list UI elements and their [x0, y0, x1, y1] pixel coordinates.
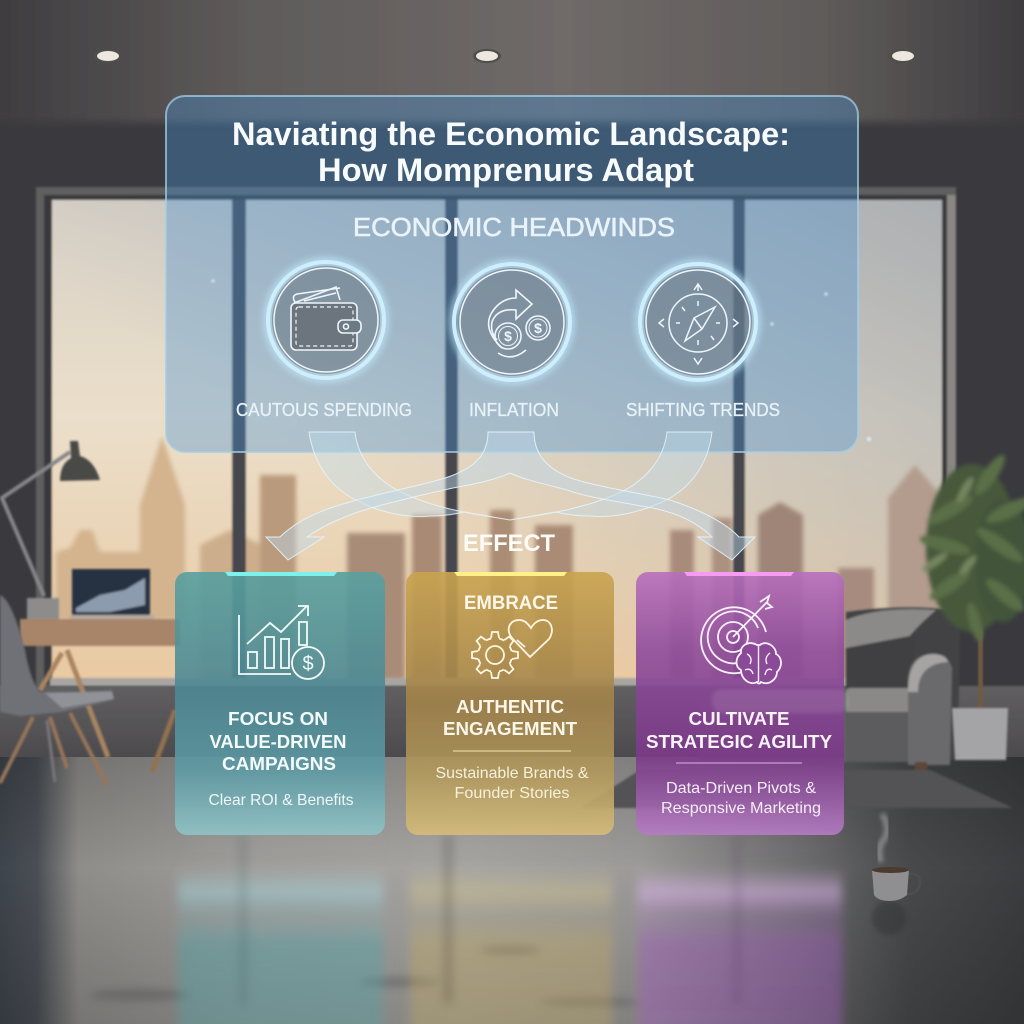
card heading [646, 709, 832, 752]
desk with laptop [20, 569, 180, 772]
card heading: VALUE-DRIVEN [210, 732, 346, 752]
card detail: Founder Stories [454, 785, 570, 802]
coffee cup [872, 814, 920, 935]
card reflections on floor [178, 835, 842, 1024]
card heading: FOCUS ON [228, 709, 328, 729]
card detail: Clear ROI & Benefits [208, 792, 354, 809]
panel: strategic agility [636, 572, 848, 835]
card detail [661, 780, 821, 817]
card divider [453, 750, 571, 752]
panel: value-driven campaigns [175, 572, 385, 835]
card divider [676, 762, 802, 764]
icon: inflation coins in ring [453, 263, 571, 381]
floor [0, 757, 1024, 1024]
icon: wallet in ring [267, 261, 385, 379]
arrows: outer headwinds converging to centre [309, 432, 712, 520]
card detail [436, 765, 589, 802]
card heading: ENGAGEMENT [443, 719, 577, 739]
sparkles [212, 280, 871, 441]
card detail: Responsive Marketing [661, 800, 821, 817]
background wall [0, 110, 1024, 770]
lower wall [0, 686, 1024, 760]
icon: inflation coins in ring: $ [534, 320, 542, 336]
label: shifting trends: SHIFTING TRENDS [626, 400, 780, 420]
icon: gear and heart [472, 620, 552, 678]
card heading: CULTIVATE [688, 709, 790, 729]
title [232, 116, 790, 188]
icon: growth chart with dollar [239, 606, 324, 679]
card heading [443, 697, 577, 739]
potted plant [918, 451, 1024, 760]
icon: inflation coins in ring: $ [504, 328, 512, 344]
arrows: inflation splitting to left and right cards [266, 432, 755, 560]
icon: target and brain [701, 596, 781, 684]
chair [0, 595, 114, 785]
section heading: economic headwinds: ECONOMIC HEADWINDS [353, 212, 675, 242]
effect label: EFFECT [463, 530, 555, 557]
card heading [210, 709, 346, 774]
panel: authentic engagement [406, 572, 614, 835]
icon: growth chart with dollar: $ [302, 653, 314, 675]
sofa rug [580, 770, 1013, 808]
desk lamp [2, 441, 100, 596]
label: cautous spending: CAUTOUS SPENDING [236, 400, 412, 420]
icon: compass in ring [639, 263, 757, 381]
headwinds glass panel [166, 96, 858, 452]
card heading: CAMPAIGNS [222, 754, 336, 774]
card detail: Sustainable Brands & [436, 765, 589, 782]
ceiling [0, 0, 1024, 122]
ceiling lights [94, 49, 917, 63]
card eyebrow: EMBRACE [464, 593, 558, 614]
title: Naviating the Economic Landscape: [232, 116, 790, 152]
title: How Momprenurs Adapt [318, 152, 694, 188]
card detail: Data-Driven Pivots & [666, 780, 816, 797]
window with skyline [36, 187, 956, 687]
card heading: STRATEGIC AGILITY [646, 732, 832, 752]
sofa [700, 607, 960, 784]
floor stains [90, 945, 640, 1006]
label: inflation: INFLATION [469, 400, 559, 420]
card heading: AUTHENTIC [456, 697, 564, 717]
